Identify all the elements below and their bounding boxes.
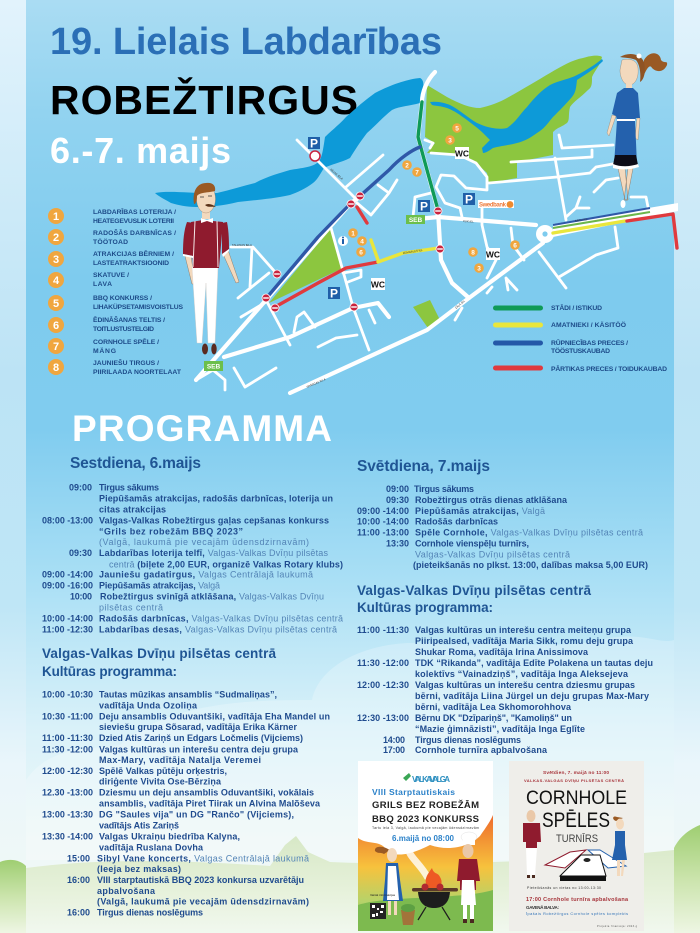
sunday programme: 09:00 -14:00 <box>357 506 409 516</box>
poster: Cornhole tournament: 17:00 Cornhole turnīra apbalvošana <box>526 897 629 903</box>
saturday culture programme: VIII starptautiskā BBQ 2023 konkursa uzvarētāju <box>97 875 304 885</box>
saturday culture programme: Spēlē Valkas pūtēju orķestris, <box>99 766 227 776</box>
orange map markers: 6 <box>359 250 363 256</box>
poster: BBQ contest: VIII Starptautiskais <box>372 787 455 797</box>
saturday culture programme: vadītājs Atis Zariņš <box>99 821 179 831</box>
legend: route colours <box>493 304 667 373</box>
sunday programme <box>357 458 648 570</box>
info sign <box>338 236 348 246</box>
legend: numbered markers <box>48 208 183 376</box>
sunday culture programme: Shukar Roma, vadītāja Irina Anissimova <box>415 647 589 657</box>
legend: numbered markers: BBQ KONKURSS / <box>93 295 152 302</box>
WC signs: WC <box>486 250 500 260</box>
sunday programme: 13:30 <box>386 539 409 549</box>
saturday culture programme: Valgas-Valkas Dvīņu pilsētas centrā <box>42 646 276 661</box>
poster girl <box>375 847 403 915</box>
saturday culture programme: 12.30 -13:00 <box>42 788 93 798</box>
orange map markers: 4 <box>360 238 364 246</box>
saturday culture programme: vadītāja Unda Ozoliņa <box>99 700 198 710</box>
saturday programme: Radošās darbnīcas, Valgas-Valkas Dvīņu pilsētas centrā <box>99 614 343 624</box>
poster: Cornhole tournament: Pieteikšanās un vietas no 13:00-13:30 <box>527 886 601 890</box>
saturday culture programme: Deju ansamblis Oduvantšiki, vadītāja Eha Mandel un <box>99 711 330 721</box>
parking signs: P <box>330 286 338 300</box>
legend: numbered markers: 3 <box>53 254 59 266</box>
legend: numbered markers: 6 <box>53 320 59 332</box>
poster: Cornhole tournament: SPĒLES <box>542 809 610 832</box>
legend: numbered markers: LIHAKÜPSETAMISVOISTLUS <box>93 302 183 311</box>
legend: numbered markers: LABDARĪBAS LOTERIJA / <box>93 208 176 216</box>
sunday culture programme: 12:00 -12:30 <box>357 680 409 690</box>
legend: numbered markers: JAUNIEŠU TIRGUS / <box>93 358 159 367</box>
orange map markers: 1 <box>351 230 355 238</box>
orange map markers: 7 <box>415 170 419 176</box>
orange map markers: 8 <box>471 250 475 256</box>
poster: Cornhole tournament <box>509 761 644 931</box>
poster: Cornhole tournament: GAVENĀ BALVA: <box>526 904 560 910</box>
saturday culture programme: Dziesmu un deju ansamblis Oduvantšiki, vokālais <box>99 788 314 798</box>
title: 6.-7. maijs <box>50 130 231 171</box>
sunday programme: Cornhole vienspēļu turnīrs, <box>415 539 529 549</box>
legend: numbered markers: SKATUVE / <box>93 272 129 279</box>
saturday culture programme: 11:00 -11:30 <box>42 733 93 743</box>
WC signs <box>371 147 500 290</box>
orange map markers: 3 <box>477 266 481 272</box>
legend: numbered markers: 4 <box>53 275 60 287</box>
heading: programme: PROGRAMMA <box>72 408 332 449</box>
sunday culture programme: Kultūras programma: <box>357 600 493 615</box>
legend: numbered markers: LAVA <box>93 281 112 288</box>
saturday culture programme: 11:30 -12:00 <box>42 744 93 754</box>
sunday culture programme: bērni, vadītāja Lea Skhomorohhova <box>415 702 572 712</box>
street names <box>232 168 588 389</box>
sunday programme: Spēle Cornhole, Valgas-Valkas Dvīņu pilsētas centrā <box>415 528 643 538</box>
legend: numbered markers: 7 <box>53 341 59 353</box>
saturday culture programme: sieviešu grupa Sõsarad, vadītāja Erika Kärner <box>99 722 297 732</box>
poster logo <box>403 773 450 784</box>
sunday programme: Robežtirgus otrās dienas atklāšana <box>415 495 568 505</box>
saturday programme: Sestdiena, 6.maijs <box>70 455 201 472</box>
orange map markers: 2 <box>405 162 409 170</box>
sunday culture programme: Valgas kultūras un interešu centra meiteņu grupa <box>415 625 632 635</box>
sunday culture programme: 17:00 <box>383 745 405 755</box>
saturday programme: Labdarības desas, Valgas-Valkas Dvīņu pilsētas centrā <box>99 624 337 634</box>
saturday programme: centrā (biļete 2,00 EUR, organizē Valkas Rotary klubs) <box>109 559 343 569</box>
saturday culture programme: DG "Saules vija" un DG "Rančo" (Vijciems), <box>99 810 294 820</box>
saturday programme: 11:00 -12:30 <box>42 624 93 634</box>
street names: KUK IEL <box>463 219 474 224</box>
saturday programme: 09:30 <box>69 548 92 558</box>
sunday culture programme: 12:30 -13:00 <box>357 713 409 723</box>
saturday culture programme: Max-Mary, vadītāja Natalja Veremei <box>99 755 261 765</box>
poster: BBQ contest: 6.maijā no 08:00 <box>392 834 455 843</box>
poster: Cornhole tournament: VALKAS-VALGAS DVĪŅU PILSĒTAS CENTRĀ <box>524 778 624 783</box>
saturday programme: Piepūšamās atrakcijas, radošās darbnīcas, loterija un <box>99 494 333 504</box>
sunday culture programme: Bērnu DK "Dzīpariņš", "Kamoliņš" un <box>415 713 572 723</box>
saturday culture programme: vadītāja Ruslana Dovha <box>99 842 204 852</box>
saturday programme: Robežtirgus svinīgā atklāšana, Valgas-Valkas Dvīņu <box>100 591 324 601</box>
sunday culture programme <box>357 583 653 755</box>
sunday programme: Tirgus sākums <box>414 484 474 494</box>
saturday culture programme: Sibyl Vane koncerts, Valgas Centrālajā laukumā <box>97 853 309 863</box>
saturday programme: 08:00 -13:00 <box>42 515 93 525</box>
saturday culture programme: (Valgā, laukumā pie vecajām ūdensdzirnavām) <box>97 897 309 907</box>
sunday culture programme: TDK “Rikanda”, vadītāja Edīte Polakena un tautas deju <box>415 658 653 668</box>
sunday culture programme: Piiripealsed, vadītāja Maria Sikk, romu deju grupa <box>415 636 634 646</box>
title: 19. Lielais Labdarības <box>50 21 442 63</box>
sunday programme: 11:00 -13:00 <box>357 528 409 538</box>
saturday culture programme: Dzied Atis Zariņš un Edgars Ločmelis (Vijciems) <box>99 733 303 743</box>
poster grill <box>409 845 458 920</box>
green patch <box>413 300 440 328</box>
legend: numbered markers: MÄNG <box>93 347 116 355</box>
street names: RĪGAS IELA <box>329 168 344 181</box>
saturday culture programme: 16:00 <box>67 908 90 918</box>
illustration: woman <box>607 53 667 208</box>
sunday culture programme: bērni, vadītāja Liina Jürgel un deju grupas Max-Mary <box>415 691 649 701</box>
green triangle park <box>269 228 343 303</box>
title <box>50 21 442 171</box>
legend: numbered markers: TOITLUSTUSTELGID <box>93 326 154 333</box>
sunday culture programme: 14:00 <box>383 735 405 745</box>
saturday culture programme: Tirgus dienas noslēgums <box>97 908 203 918</box>
sunday programme: (pieteikšanās no plkst. 13:00, dalības maksa 5,00 EUR) <box>413 560 648 570</box>
lake in park <box>430 59 603 153</box>
saturday culture programme: 13:00 -13:30 <box>42 810 93 820</box>
poster: Cornhole tournament: Īpašais Robežtirgus Cornhole spēles komplekts <box>526 912 628 916</box>
poster chef <box>457 832 480 923</box>
SEB and Swedbank: Swedbank <box>479 202 507 208</box>
parking signs: P <box>310 136 318 150</box>
saturday programme: 09:00 -16:00 <box>42 580 93 590</box>
sunday programme: 10:00 -14:00 <box>357 517 409 527</box>
saturday culture programme: 13:30 -14:00 <box>42 831 93 841</box>
saturday culture programme: Valgas Ukraiņu biedrība Kalyna, <box>99 831 240 841</box>
street names: ZEMGALES IEL <box>403 248 424 255</box>
river west <box>155 78 423 207</box>
saturday culture programme: 12:00 -12:30 <box>42 766 93 776</box>
saturday programme: 09:00 -14:00 <box>42 570 93 580</box>
market routes <box>269 102 677 307</box>
poster: BBQ contest: BBQ 2023 KONKURSS <box>372 814 479 825</box>
legend: route colours: RŪPNIECĪBAS PRECES / <box>551 339 628 347</box>
saturday culture programme: 16:00 <box>67 875 90 885</box>
poster: Cornhole tournament: CORNHOLE <box>526 788 627 809</box>
saturday culture programme: Kultūras programma: <box>42 664 177 679</box>
sunday culture programme: Tirgus dienas noslēgums <box>415 735 521 745</box>
poster: BBQ contest: GRILS BEZ ROBEŽĀM <box>372 799 479 811</box>
sunday programme: 09:30 <box>386 495 409 505</box>
sunday programme: Svētdiena, 7.maijs <box>357 458 490 475</box>
orange map markers: 5 <box>455 126 459 132</box>
poster: BBQ contest: Tartu iela 3, Valgā, laukumā pie vecajām ūdensdzirnavām <box>372 826 479 830</box>
legend: numbered markers: RADOŠĀS DARBNĪCAS / <box>93 228 176 237</box>
saturday culture programme <box>42 646 330 918</box>
saturday programme: (Valgā, laukumā pie vecajām ūdensdzirnavām) <box>99 537 309 547</box>
no entry signs <box>262 192 444 312</box>
legend: route colours: TÖÖSTUSKAUBAD <box>551 346 610 355</box>
saturday programme: Piepūšamās atrakcijas, Valgā <box>99 580 220 590</box>
sunday programme: Piepūšamās atrakcijas, Valgā <box>415 506 545 516</box>
poster: Cornhole tournament: Projekta finansēja: 2023.g <box>597 925 638 928</box>
saturday programme: 10:00 -14:00 <box>42 614 93 624</box>
legend: route colours: PĀRTIKAS PRECES / TOIDUKAUBAD <box>551 365 667 373</box>
saturday programme <box>42 455 343 634</box>
sunday programme: Radošās darbnīcas <box>415 517 498 527</box>
saturday programme: 09:00 <box>69 483 92 493</box>
saturday programme: Jauniešu gadatirgus, Valgas Centrālajā laukumā <box>99 570 313 580</box>
illustration: man <box>183 183 239 354</box>
poster: BBQ contest <box>358 761 493 931</box>
WC signs: WC <box>455 148 469 158</box>
parking signs: P <box>420 200 428 214</box>
saturday programme: citas atrakcijas <box>99 505 166 515</box>
sunday programme: 09:00 <box>386 484 409 494</box>
orange map markers: 6 <box>513 242 517 250</box>
saturday culture programme: apbalvošana <box>97 886 156 896</box>
poster QR code: Vairāk informācijas <box>370 893 396 897</box>
legend: route colours: STĀDI / ISTIKUD <box>551 304 602 312</box>
legend: numbered markers: ĒDINĀŠANAS TELTIS / <box>93 315 165 324</box>
saturday culture programme: Valgas kultūras un interešu centra deju grupa <box>99 744 299 754</box>
legend: numbered markers: 5 <box>53 298 59 310</box>
legend: numbered markers: LASTEATRAKTSIOONID <box>93 260 169 267</box>
saturday culture programme: (Ieeja bez maksas) <box>97 864 181 874</box>
street names: ZĀĻĀ IEL <box>454 299 466 310</box>
sunday culture programme: kolektīvs “Vainadziņš”, vadītāja Inga Aleksejeva <box>415 669 629 679</box>
street names: SPĀRĢAS IELA <box>306 377 326 389</box>
poster QR code <box>370 893 396 919</box>
legend: numbered markers: 2 <box>53 232 59 244</box>
saturday programme: Tirgus sākums <box>99 483 159 493</box>
street names: TALLINAS IELA <box>232 243 252 247</box>
saturday programme: 10:00 <box>70 591 92 601</box>
poster basket <box>401 904 415 925</box>
saturday programme: Labdarības loterija telfī, Valgas-Valkas Dvīņu pilsētas <box>99 548 328 558</box>
legend: numbered markers: 8 <box>53 362 59 374</box>
orange map markers: 3 <box>448 138 452 144</box>
poster man <box>523 810 541 878</box>
legend: numbered markers: TÖÖTOAD <box>93 237 128 246</box>
saturday culture programme: diriģente Vivita Ose-Bērziņa <box>99 777 222 787</box>
saturday culture programme: 10:30 -11:00 <box>42 711 93 721</box>
poster woman <box>612 817 627 876</box>
WC signs: WC <box>371 280 385 290</box>
legend: numbered markers: CORNHOLE SPĒLE / <box>93 338 159 346</box>
SEB and Swedbank: SEB <box>207 364 220 370</box>
legend: numbered markers: PIIRILAADA NOORTELAAT <box>93 369 182 376</box>
legend: numbered markers: HEATEGEVUSLIK LOTERII <box>93 218 174 225</box>
green park <box>425 56 602 183</box>
sunday culture programme: Cornhole turnīra apbalvošana <box>415 745 548 755</box>
poster: Cornhole tournament: TURNĪRS <box>556 833 598 845</box>
saturday programme: Valgas-Valkas Robežtirgus gaļas cepšanas konkurss <box>99 515 329 525</box>
saturday culture programme: 15:00 <box>67 853 90 863</box>
saturday programme: pilsētas centrā <box>99 603 163 613</box>
legend: route colours: AMATNIEKI / KÄSITÖÖ <box>551 320 626 329</box>
saturday culture programme: Tautas mūzikas ansamblis “Sudmaliņas”, <box>99 690 277 700</box>
saturday programme: “Grils bez robežām BBQ 2023” <box>99 526 243 536</box>
sunday programme: Valgas-Valkas Dvīņu pilsētas centrā <box>415 550 570 560</box>
sunday culture programme: 11:00 -11:30 <box>357 625 409 635</box>
poster: Cornhole tournament: Svētdien, 7. maijā no 11:00 <box>543 770 609 776</box>
saturday culture programme: ansamblis, vadītāja Piret Tiirak un Alvina Malõševa <box>99 799 321 809</box>
poster cornhole boards <box>545 850 626 881</box>
SEB and Swedbank: SEB <box>409 217 422 224</box>
sunday culture programme: “Mazie ģimnāzisti”, vadītāja Inga Eglīte <box>415 724 585 734</box>
orange map markers <box>348 123 520 273</box>
SEB and Swedbank <box>204 200 514 371</box>
street names: SĀRU IEL <box>575 217 588 223</box>
legend: numbered markers: ATRAKCIJAS BĒRNIEM / <box>93 250 174 258</box>
poster logo: VALKAVALGA <box>412 775 450 784</box>
parking signs: P <box>465 192 473 206</box>
map <box>155 56 678 393</box>
parking signs <box>308 136 475 300</box>
sunday culture programme: 11:30 -12:00 <box>357 658 409 668</box>
sunday culture programme: Valgas kultūras un interešu centra dziesmu grupas <box>415 680 635 690</box>
sunday culture programme: Valgas-Valkas Dvīņu pilsētas centrā <box>357 583 591 598</box>
title: ROBEŽTIRGUS <box>50 77 358 123</box>
roads <box>196 72 678 393</box>
legend: numbered markers: 1 <box>53 211 59 223</box>
saturday culture programme: 10:00 -10:30 <box>42 690 93 700</box>
